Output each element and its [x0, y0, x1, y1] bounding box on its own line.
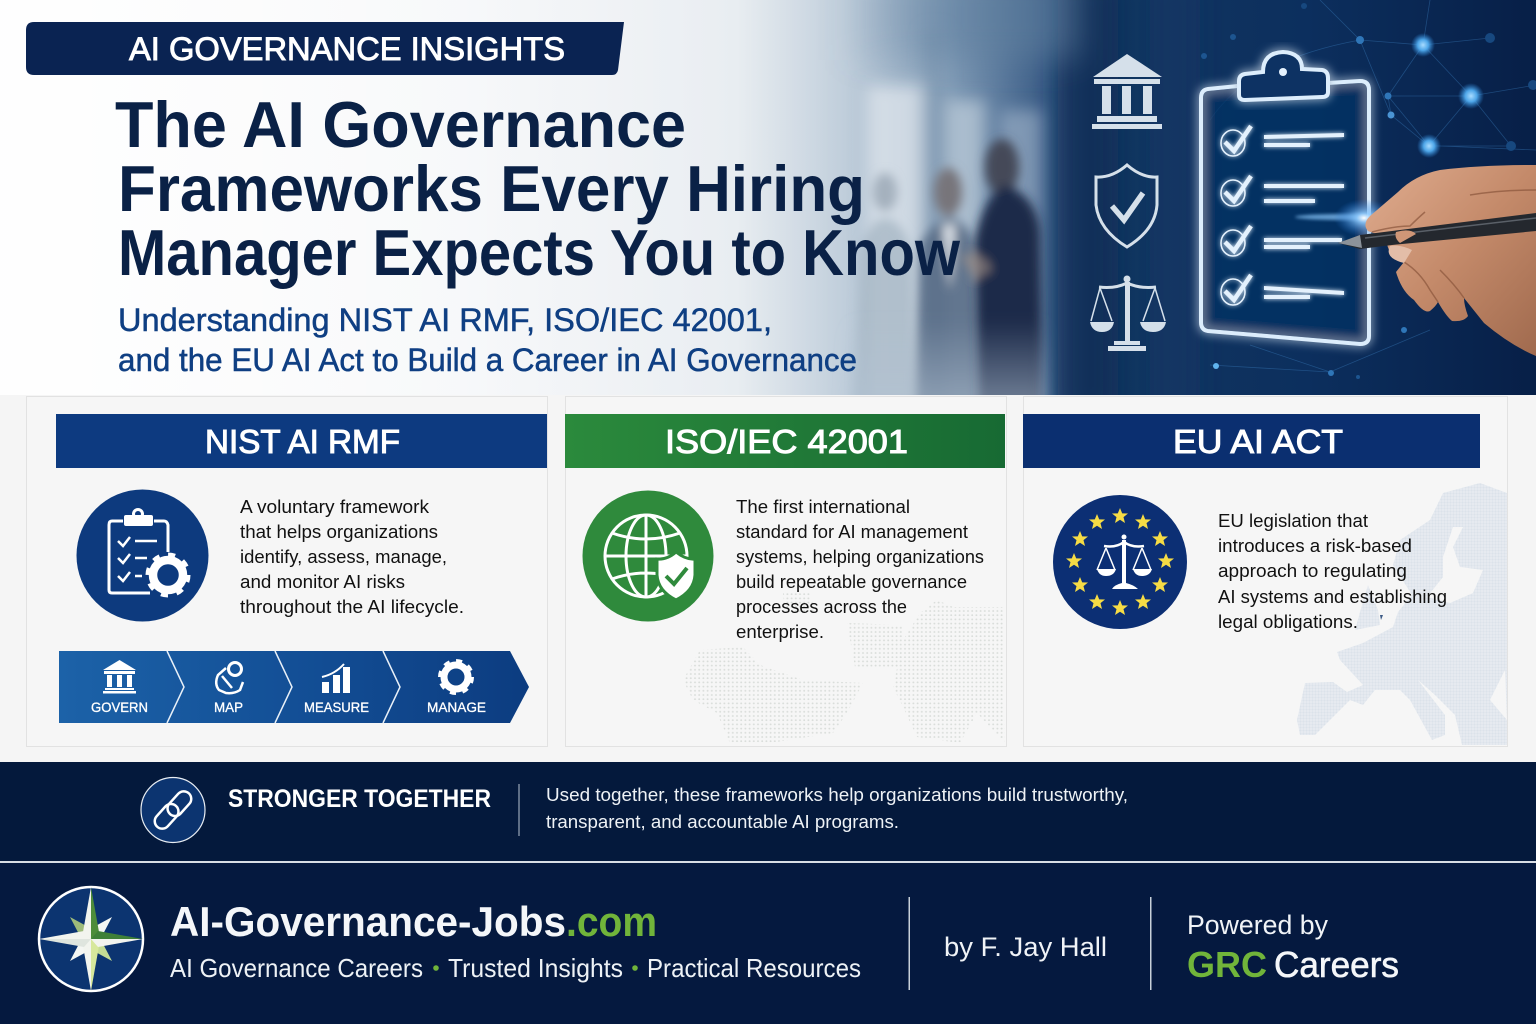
heading: ISO/IEC 42001: [565, 414, 1005, 468]
description text: approach to regulating: [1218, 560, 1407, 581]
description text: systems, helping organizations: [736, 546, 984, 567]
logo: compass rose: [39, 887, 143, 991]
icon: chain link: [141, 778, 205, 842]
icon: globe with shield: [582, 490, 714, 622]
network constellation: [1210, 0, 1536, 372]
badge: AI Governance Insights: AI GOVERNANCE INSIGHTS: [129, 31, 565, 67]
thumb: [1396, 230, 1416, 243]
clipboard clip: [1239, 52, 1328, 100]
description text: processes across the: [736, 596, 907, 617]
description text: legal obligations.: [1218, 611, 1358, 632]
step: map: MAP: [214, 700, 243, 715]
tagline: Practical Resources: [647, 953, 861, 983]
description text: [546, 784, 1128, 832]
powered by GRC Careers: GRC: [1187, 944, 1267, 985]
subtitle: [118, 302, 857, 378]
dotted world map: [683, 593, 1005, 743]
description text: [736, 496, 984, 642]
powered by GRC Careers: [1187, 910, 1399, 985]
description text: The first international: [736, 496, 910, 517]
checklist items: [1221, 126, 1344, 305]
icon: shield with check: [1096, 165, 1157, 247]
clipboard outline: [1201, 81, 1369, 344]
description text: identify, assess, manage,: [240, 546, 447, 567]
powered by GRC Careers: Powered by: [1187, 910, 1328, 940]
footer: [0, 861, 1536, 1024]
description text: and monitor AI risks: [240, 571, 405, 592]
description text: build repeatable governance: [736, 571, 967, 592]
icon: scales of justice: [1090, 276, 1166, 351]
icon: EU stars and scales: [1053, 495, 1187, 629]
powered by GRC Careers: Careers: [1274, 944, 1399, 985]
heading: EU AI Act: EU AI ACT: [1173, 423, 1343, 460]
step: measure: MEASURE: [304, 700, 369, 715]
step: measure: [304, 664, 369, 715]
icon: glowing clipboard checklist: [1201, 52, 1395, 344]
description text: [1218, 510, 1447, 632]
chevron process: govern, map, measure, manage: [59, 651, 529, 723]
description text: [240, 496, 464, 617]
subtitle: and the EU AI Act to Build a Career in AI Governance: [118, 342, 857, 378]
heading: ISO/IEC 42001: ISO/IEC 42001: [665, 423, 908, 460]
subtitle: Understanding NIST AI RMF, ISO/IEC 42001,: [118, 302, 772, 338]
description text: that helps organizations: [240, 521, 438, 542]
heading: NIST AI RMF: [56, 414, 547, 468]
icon: clipboard and gear: [76, 490, 208, 622]
description text: transparent, and accountable AI programs.: [546, 811, 899, 832]
heading: NIST AI RMF: NIST AI RMF: [205, 423, 400, 460]
tagline: AI Governance Careers: [170, 953, 423, 983]
panel: ISO/IEC 42001: [565, 396, 1006, 746]
description text: introduces a risk-based: [1218, 535, 1412, 556]
panel: NIST AI RMF: [26, 396, 548, 746]
light flare: [1294, 200, 1382, 236]
hero banner: [0, 0, 1536, 415]
network nodes: [1201, 3, 1536, 379]
title: The AI Governance: [115, 88, 686, 161]
step: govern: GOVERN: [91, 700, 148, 715]
office background photo: [858, 0, 1092, 395]
description text: throughout the AI lifecycle.: [240, 596, 464, 617]
finger creases: [1372, 190, 1536, 302]
heading: EU AI Act: [1023, 414, 1480, 468]
panel: EU AI Act: [1023, 396, 1508, 746]
icon: government building: [1092, 54, 1162, 129]
description text: EU legislation that: [1218, 510, 1368, 531]
step: manage: [427, 661, 486, 715]
dotted Europe map: [1297, 483, 1507, 745]
hand holding pen: [1338, 165, 1536, 356]
tagline: [170, 953, 861, 983]
pen: [1338, 213, 1536, 249]
fade panel behind headline: [0, 0, 840, 395]
heading: STRONGER TOGETHER: [228, 785, 491, 813]
title: Manager Expects You to Know: [118, 216, 960, 289]
step: manage: MANAGE: [427, 700, 486, 715]
description text: enterprise.: [736, 621, 824, 642]
site name: AI-Governance-Jobs: [170, 898, 566, 945]
author: by F. Jay Hall: [944, 932, 1107, 962]
description text: A voluntary framework: [240, 496, 430, 517]
step: map: [214, 662, 243, 715]
description text: standard for AI management: [736, 521, 968, 542]
description text: Used together, these frameworks help organizations build trustworthy,: [546, 784, 1128, 805]
blurred business people: [850, 139, 1045, 415]
step: govern: [91, 660, 148, 715]
tagline: Trusted Insights: [448, 953, 623, 983]
site name: .com: [566, 898, 657, 945]
description text: AI systems and establishing: [1218, 586, 1447, 607]
title: [115, 88, 960, 289]
banner: stronger together: [0, 762, 1536, 861]
badge: AI Governance Insights: [26, 22, 624, 75]
title: Frameworks Every Hiring: [118, 152, 865, 225]
